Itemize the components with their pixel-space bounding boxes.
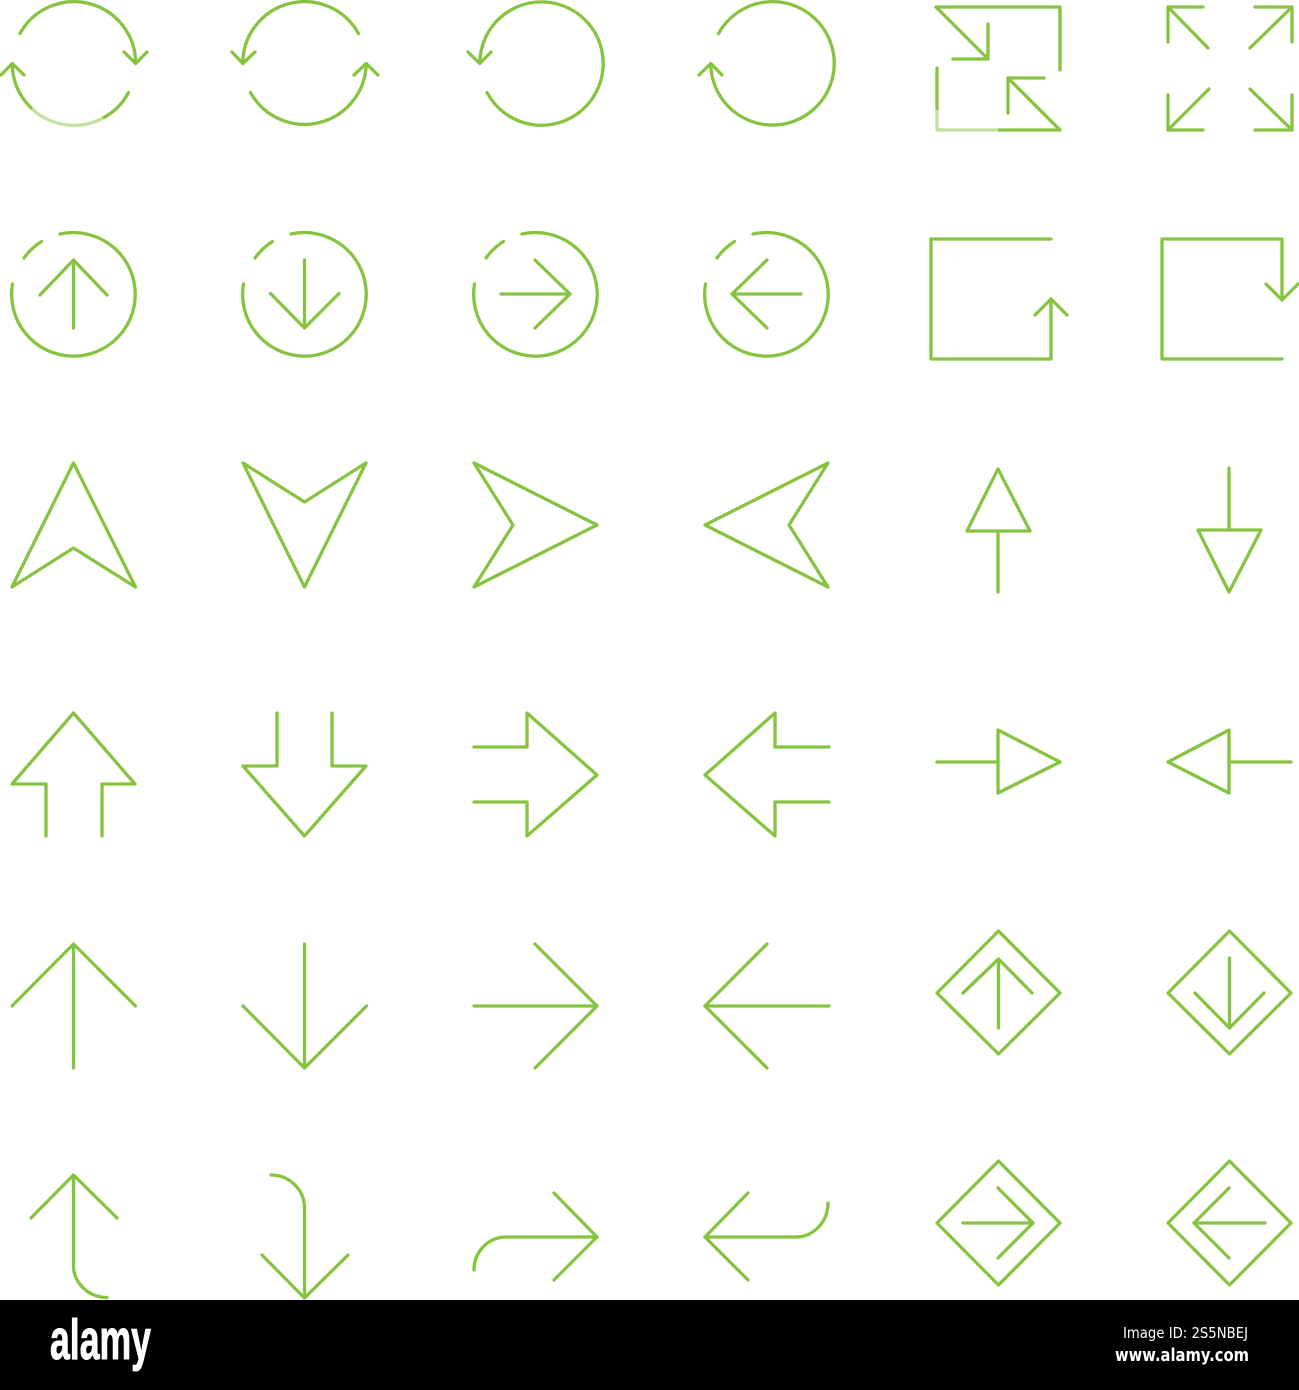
icon: curved-tail arrow right [474,1193,597,1280]
icon: navigation pointer up [12,463,136,587]
footer logo: alamy [50,1308,151,1372]
image id: Image ID: 2S5NBEJ [1123,1324,1248,1342]
icon: open block arrow left [705,713,829,836]
icon: plain arrow up [12,944,136,1068]
icon: down arrow in broken circle [243,233,366,356]
icon: curved-tail arrow up [31,1175,117,1298]
icon: up arrow in broken circle [12,233,135,356]
icon: square path with up arrow [931,239,1067,359]
icon: up arrow in diamond [937,931,1060,1054]
icon: down arrow in diamond [1168,931,1291,1054]
icon: four-way expand arrows [1168,7,1292,130]
icon: left arrow in diamond [1168,1161,1291,1285]
icon: navigation pointer down [243,463,366,587]
icon: triangle-head arrow right [937,730,1060,793]
icon: open block arrow up [12,713,135,836]
icon: counterclockwise two-arrow refresh [232,2,378,124]
icon: right arrow in diamond [937,1161,1060,1285]
icon: right arrow in broken circle [474,233,597,356]
icon: clockwise circle arrow [699,2,834,125]
icon: left arrow in broken circle [705,233,828,356]
icon: curved-tail arrow down [262,1175,348,1298]
website: www.alamy.com [1115,1345,1249,1366]
icon: square path with down arrow [1162,239,1298,359]
icon: clockwise two-arrow refresh [1,2,147,125]
icon: plain arrow down [243,944,366,1068]
icon: plain arrow left [705,944,829,1068]
icon: triangle-head arrow left [1168,730,1291,793]
footer bar [0,1300,1299,1390]
icon: navigation pointer left [705,463,828,587]
icon: counterclockwise circle arrow [468,2,603,125]
icon: triangle-head arrow down [1198,468,1261,592]
icon: navigation pointer right [474,463,597,587]
icon: triangle-head arrow up [967,469,1030,592]
icon: collapse square arrows [936,7,1060,130]
icon: open block arrow down [243,713,366,836]
icon: plain arrow right [474,944,597,1068]
icon: open block arrow right [474,713,597,836]
icon: curved-tail arrow left [705,1193,828,1280]
